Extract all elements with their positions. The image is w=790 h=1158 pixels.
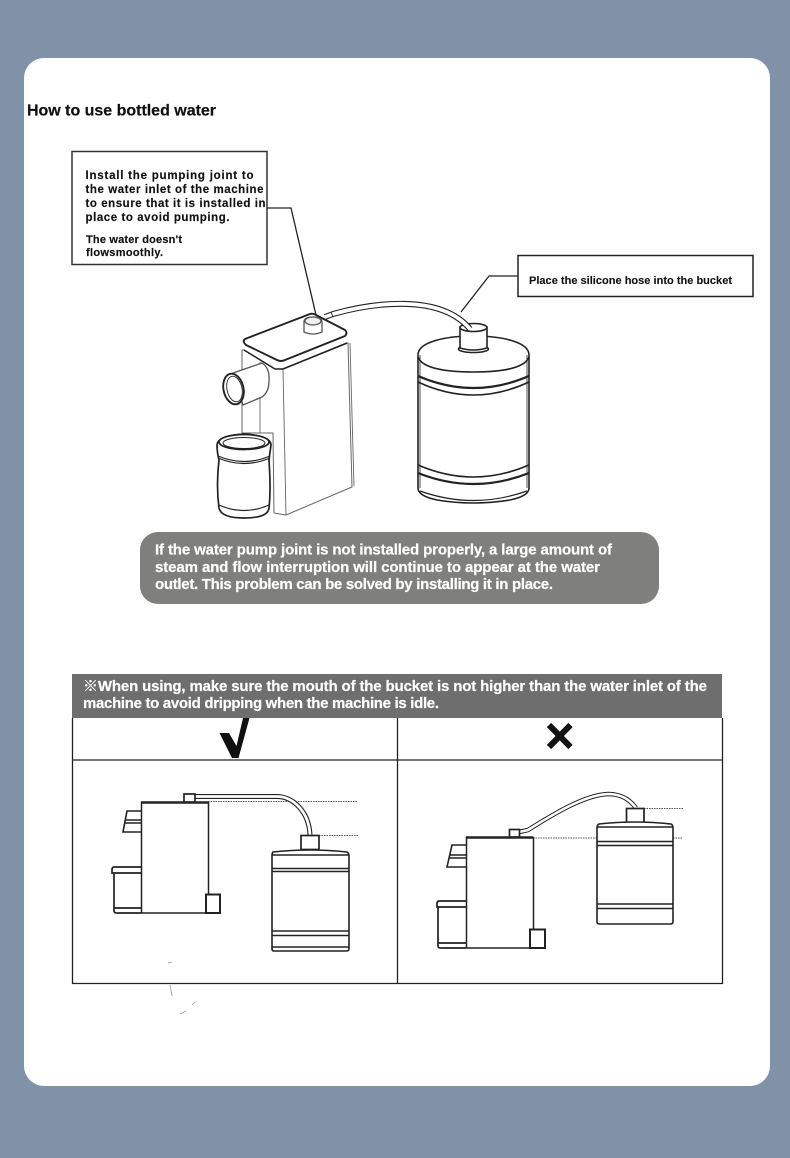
spout	[123, 811, 141, 832]
cup	[112, 867, 141, 913]
dotted level guide lines	[208, 802, 358, 836]
callout: install joint instructions: the water inlet of the machine	[86, 184, 264, 196]
icon: check mark	[220, 718, 250, 758]
silicone hose	[325, 304, 470, 329]
callout: install joint instructions: to ensure that it is installed in	[86, 198, 266, 210]
bucket neck	[458, 324, 488, 352]
water outlet spout	[220, 363, 269, 406]
foot box	[206, 894, 220, 913]
notice banner	[72, 674, 722, 718]
main illustration: machine, cup, hose and bucket	[217, 304, 529, 518]
icon: cross mark	[549, 725, 570, 747]
inlet joint	[510, 830, 520, 837]
bucket	[272, 850, 349, 951]
leader line: hose callout to bucket	[461, 276, 518, 312]
bucket cap	[301, 836, 319, 850]
comparison table frame	[72, 718, 722, 984]
callout: silicone hose: Place the silicone hose into the bucket	[529, 275, 732, 287]
callout: installation warning: If the water pump joint is not installed properly, a large amount of	[155, 542, 613, 558]
dotted level guide lines	[533, 808, 683, 838]
bucket	[418, 336, 529, 503]
callout: install joint instructions	[72, 152, 267, 264]
callout: install joint instructions: place to avoid pumping.	[86, 212, 230, 224]
machine	[142, 802, 208, 913]
callout: installation warning: outlet. This problem can be solved by installing it in place.	[155, 576, 553, 593]
callout: silicone hose	[518, 256, 753, 296]
notice banner: machine to avoid dripping when the machine is idle.	[83, 695, 439, 712]
callout: installation warning	[140, 532, 659, 604]
title: How to use bottled water	[27, 102, 216, 120]
callout: install joint instructions: The water doesn't	[86, 234, 182, 246]
scanner specks below the table	[168, 962, 195, 1014]
machine inlet joint	[304, 317, 322, 334]
machine body	[242, 314, 354, 515]
cup	[437, 901, 466, 948]
incorrect setup diagram	[437, 794, 683, 948]
bucket	[597, 822, 673, 924]
leader line: joint callout to machine inlet	[267, 208, 316, 315]
callout: install joint instructions: Install the pumping joint to	[86, 170, 254, 182]
spout	[447, 845, 466, 867]
machine	[466, 838, 534, 948]
bucket cap	[626, 808, 644, 822]
foot box	[530, 930, 545, 948]
callout: installation warning: steam and flow interruption will continue to appear at the water	[155, 559, 600, 576]
correct setup diagram	[112, 794, 358, 951]
water cup	[217, 434, 271, 518]
callout: install joint instructions: flowsmoothly.	[86, 247, 163, 259]
inlet joint	[184, 794, 195, 802]
hose	[195, 796, 310, 835]
hose	[519, 794, 636, 832]
notice banner: ※When using, make sure the mouth of the bucket is not higher than the water inlet of the	[83, 678, 707, 695]
